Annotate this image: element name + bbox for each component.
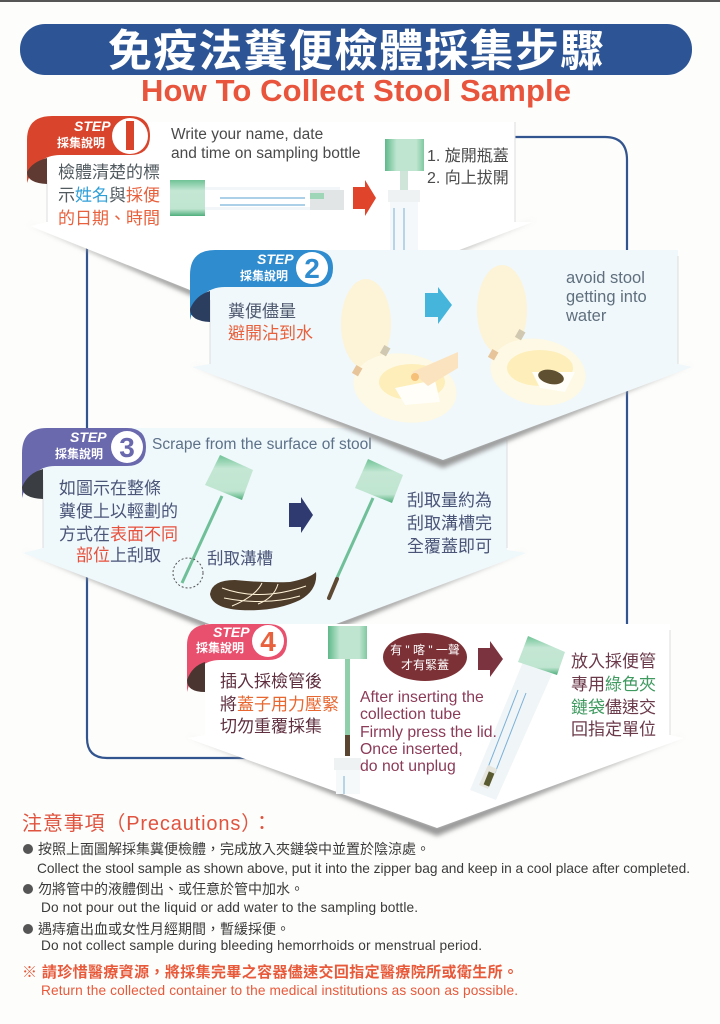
step 4 tab <box>187 624 287 692</box>
title banner <box>20 24 692 76</box>
subtitle: How To Collect Stool Sample <box>141 73 571 108</box>
icon: vertical sampling bottle <box>385 139 424 252</box>
step 1 english text: Write your name, date <box>171 126 323 143</box>
label: scraping groove: 刮取溝槽 <box>207 549 273 568</box>
step 2 tab: 2 <box>304 253 320 284</box>
notice <box>22 963 518 998</box>
step 4 english text <box>360 689 497 775</box>
step 2 tab: 採集說明 <box>240 268 288 283</box>
precaution 1: 按照上面圖解採集糞便檢體，完成放入夾鏈袋中並置於陰涼處。 <box>38 841 430 857</box>
step 4 right text: 鏈袋儘速交 <box>571 698 656 717</box>
step 2 english text: water <box>565 307 607 325</box>
icon: angled tube <box>470 636 565 800</box>
step 3 heading: Scrape from the surface of stool <box>152 436 372 453</box>
step 4 right text: 放入採便管 <box>571 652 656 671</box>
callout: click sound: 才有緊蓋 <box>401 658 449 672</box>
connector line <box>87 137 627 758</box>
arrow: red <box>353 180 376 216</box>
icon: vertical tube <box>328 626 367 794</box>
icon: horizontal sampling bottle <box>170 180 344 216</box>
step 3 right text: 全覆蓋即可 <box>407 537 492 556</box>
precaution 1 <box>23 841 690 876</box>
step 4 right text: 回指定單位 <box>571 720 656 739</box>
arrow: navy <box>289 497 313 533</box>
step 3 chinese text: 糞便上以輕劃的 <box>59 502 178 521</box>
step 1 instructions: 1. 旋開瓶蓋 <box>427 147 509 165</box>
callout: click sound: 有 " 喀 " 一聲 <box>390 642 460 657</box>
step 4 tab: 4 <box>260 626 276 657</box>
icon: scraper stick with sample <box>329 459 403 598</box>
step 4 english text: collection tube <box>360 706 461 723</box>
step 3 tab <box>22 428 146 499</box>
icon: toilet with hand <box>341 279 462 431</box>
step 1 tab: STEP <box>74 118 111 134</box>
notice: ※ 請珍惜醫療資源，將採集完畢之容器儘速交回指定醫療院所或衛生所。 <box>22 963 518 981</box>
precautions heading: 注意事項（Precautions）： <box>22 812 272 835</box>
step 1 tab <box>27 116 150 184</box>
callout: click sound <box>383 633 467 681</box>
step 4 chinese text: 切勿重覆採集 <box>220 717 322 736</box>
panel: step 4 <box>187 624 684 836</box>
precaution 3: Do not collect sample during bleeding hemorrhoids or menstrual period. <box>41 938 482 953</box>
precaution 3: 遇痔瘡出血或女性月經期間，暫緩採便。 <box>38 921 290 937</box>
step 1 english text: and time on sampling bottle <box>171 145 361 162</box>
step 4 english text: After inserting the <box>360 689 484 706</box>
step 3 right text: 刮取溝槽完 <box>407 514 492 533</box>
step 2 chinese text: 糞便儘量 <box>228 302 296 321</box>
arrow: cyan <box>425 287 452 324</box>
step 3 chinese text: 方式在表面不同 <box>59 525 178 544</box>
step 4 english text: do not unplug <box>360 758 456 775</box>
step 1 english text <box>171 126 361 162</box>
step 4 chinese text: 插入採檢管後 <box>220 672 322 691</box>
step 1 tab: 採集說明 <box>57 135 105 150</box>
step 1 chinese text: 的日期、時間 <box>58 209 160 228</box>
icon: toilet with stool <box>477 265 591 413</box>
step 4 tab: 採集說明 <box>196 640 244 655</box>
icon: scraper stick <box>173 455 253 588</box>
step 2 chinese text <box>228 302 313 343</box>
precaution 2: Do not pour out the liquid or add water to the sampling bottle. <box>41 900 418 915</box>
step 3 chinese text: 部位上刮取 <box>76 546 161 565</box>
step 3 tab: STEP <box>70 429 107 445</box>
step 2 tab: STEP <box>257 251 294 267</box>
precaution 1: Collect the stool sample as shown above, put it into the zipper bag and keep in a cool place after completed. <box>37 861 690 876</box>
step 2 english text: getting into <box>566 288 647 306</box>
precaution 3 <box>23 921 482 953</box>
step 4 right text: 專用綠色夾 <box>571 675 656 694</box>
step 3 right text: 刮取量約為 <box>407 491 492 510</box>
step 1 instructions: 2. 向上拔開 <box>427 169 509 187</box>
panel: step 2 <box>190 250 692 468</box>
step 1 instructions <box>427 147 509 187</box>
step 4 chinese text: 將蓋子用力壓緊 <box>220 695 339 714</box>
step 4 right text <box>571 652 656 739</box>
step 3 chinese text <box>59 479 178 565</box>
step 2 chinese text: 避開沾到水 <box>228 324 313 343</box>
step 3 tab: 3 <box>119 432 135 463</box>
arrow: maroon <box>478 641 503 677</box>
step 4 tab: STEP <box>213 624 250 640</box>
step 3 tab: 採集說明 <box>55 446 103 461</box>
step 1 chinese text: 檢體清楚的標 <box>58 163 160 182</box>
title banner: 免疫法糞便檢體採集步驟 <box>108 27 604 76</box>
step 3 chinese text: 如圖示在整條 <box>59 479 161 498</box>
icon: stool with arrows <box>210 572 316 610</box>
step 2 english text <box>565 269 647 325</box>
notice: Return the collected container to the medical institutions as soon as possible. <box>41 983 518 998</box>
precaution 2 <box>23 881 418 915</box>
step 1 chinese text <box>58 163 160 228</box>
step 2 english text: avoid stool <box>566 269 645 287</box>
precaution 2: 勿將管中的液體倒出、或任意於管中加水。 <box>38 881 304 897</box>
step 1 chinese text: 示姓名與採便 <box>58 186 160 205</box>
panel: step 1 <box>27 116 535 330</box>
panel: step 3 <box>22 428 526 656</box>
step 4 chinese text <box>220 672 339 736</box>
step 4 english text: Once inserted, <box>360 741 463 758</box>
step 4 english text: Firmly press the lid. <box>360 724 497 741</box>
step 2 tab <box>190 250 333 322</box>
step 3 right text <box>407 491 492 556</box>
